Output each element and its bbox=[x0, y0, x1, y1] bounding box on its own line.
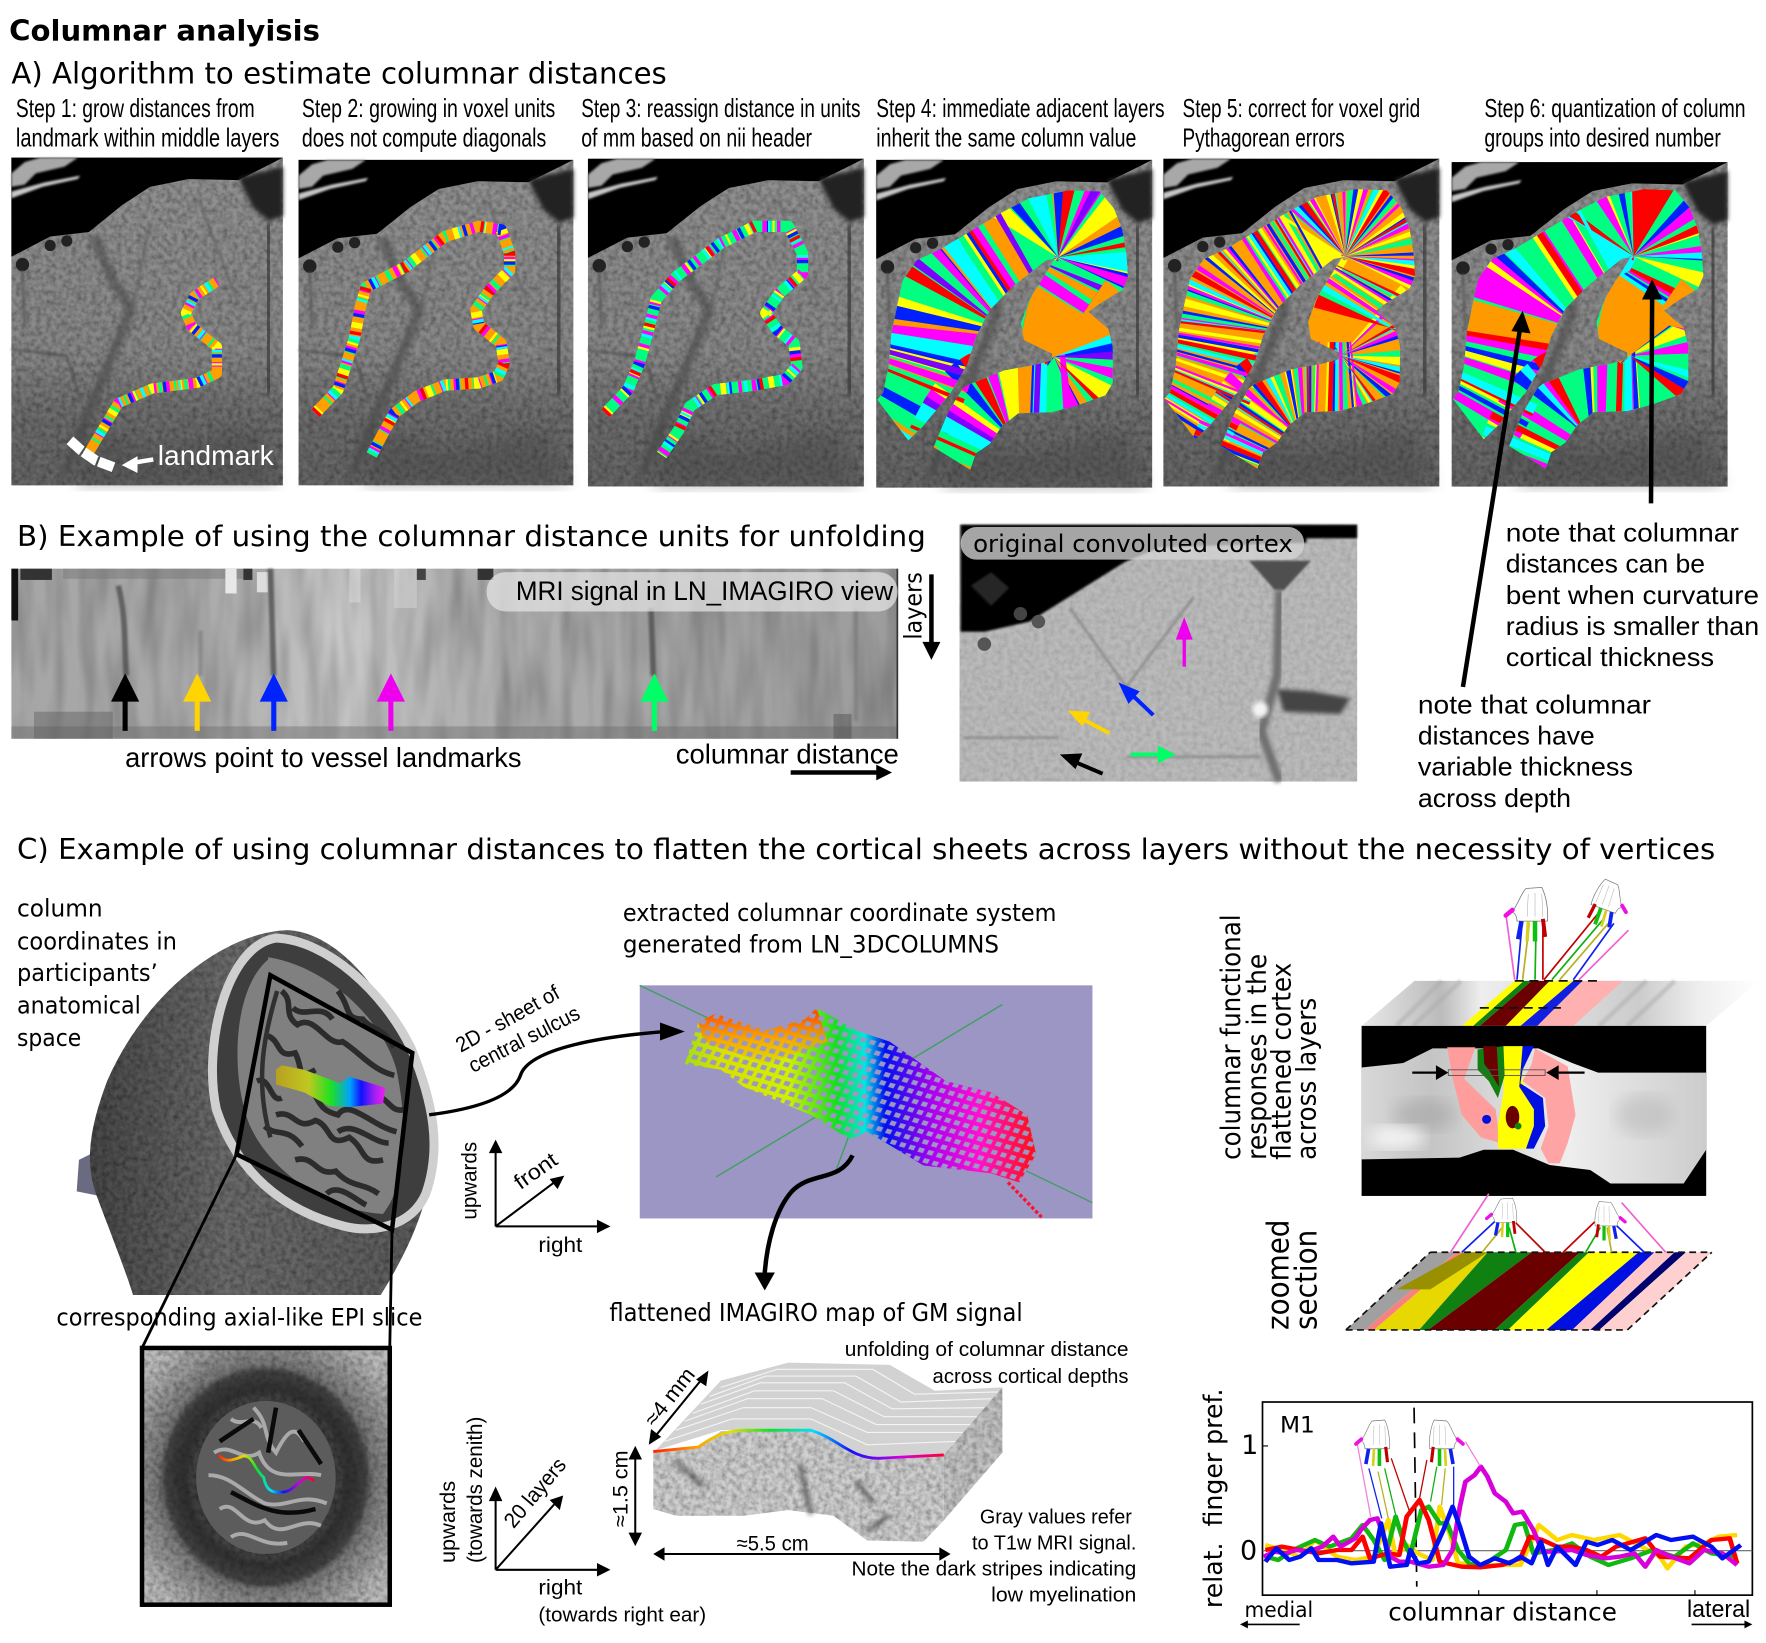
note: unfolding across depths: unfolding of columnar distance bbox=[845, 1339, 1128, 1361]
pill label: MRI signal: MRI signal in LN_IMAGIRO view bbox=[516, 576, 894, 606]
heading: section A: A) Algorithm to estimate columnar distances bbox=[11, 56, 667, 90]
step 5 label: Pythagorean errors bbox=[1183, 124, 1345, 152]
note: gray values: low myelination bbox=[991, 1584, 1136, 1606]
rainbow contour bbox=[219, 1455, 314, 1492]
zoomed hands with finger lines bbox=[1451, 1194, 1666, 1252]
note: bent columnar distances: distances can be bbox=[1506, 551, 1705, 579]
label: arrows point to vessel landmarks: arrows point to vessel landmarks bbox=[125, 742, 522, 773]
label: 2D sheet of central sulcus: 2D - sheet of bbox=[451, 981, 564, 1057]
axis label: medial: medial bbox=[1244, 1598, 1313, 1623]
green and dark red activation bbox=[1478, 1046, 1505, 1098]
note: bent columnar distances: bent when curvature bbox=[1506, 582, 1759, 610]
block top face bbox=[656, 1363, 1002, 1458]
rainbow columnar sheet bbox=[276, 1065, 385, 1107]
heading: section C: C) Example of using columnar distances to flatten the cortical sheets across layers without the necessity of vertices bbox=[17, 833, 1715, 866]
panel: step 1 MRI with partial ribbon and landmark bbox=[11, 158, 283, 485]
step 2 label: Step 2: growing in voxel units bbox=[302, 95, 555, 123]
landmark marker bbox=[70, 440, 275, 473]
cortex arrows bbox=[1060, 617, 1193, 774]
label: column coordinates: column bbox=[17, 895, 103, 923]
panel: zoomed section bands bbox=[1346, 1194, 1712, 1330]
top slab bbox=[1362, 981, 1759, 1026]
axes: zenith, layers, right ear: (towards right ear) bbox=[538, 1605, 706, 1627]
axes: zenith, layers, right ear: upwards bbox=[436, 1481, 460, 1563]
step 5 label: Step 5: correct for voxel grid bbox=[1183, 95, 1420, 123]
pink right activation bbox=[1523, 1048, 1576, 1163]
note: gray values: Gray values refer bbox=[980, 1507, 1132, 1529]
arrow: bent columns bbox=[1642, 279, 1662, 503]
black selection quadrilateral bbox=[237, 975, 412, 1230]
mesh colored grid bbox=[685, 1008, 1042, 1217]
step 6 label bbox=[1484, 95, 1746, 152]
axes: zenith, layers, right ear: 20 layers bbox=[499, 1453, 571, 1532]
label: column coordinates bbox=[17, 895, 177, 1052]
landmark marker: landmark bbox=[158, 440, 275, 471]
section box and arrows bbox=[1448, 1070, 1545, 1075]
panel: 3D columnar mesh bbox=[640, 985, 1092, 1218]
heading: section B: B) Example of using the columnar distance units for unfolding bbox=[17, 520, 926, 553]
step 2 label: does not compute diagonals bbox=[302, 124, 546, 152]
panel: axial EPI slice bbox=[142, 1154, 392, 1605]
note: bent columnar distances: cortical thickness bbox=[1506, 644, 1714, 672]
exposed brain bbox=[237, 957, 406, 1214]
head surface bbox=[90, 930, 433, 1295]
note: bent columnar distances: note that columnar bbox=[1506, 520, 1739, 548]
chart: relative finger preference across columnar distance bbox=[1199, 1388, 1752, 1608]
label: columnar functional responses: columnar functional bbox=[1216, 914, 1247, 1160]
panel: step 4 columns across layers bbox=[876, 160, 1152, 488]
label: column coordinates: anatomical bbox=[17, 992, 141, 1020]
zero dashed line bbox=[1414, 1408, 1417, 1587]
axes: upwards, front, right bbox=[457, 1140, 610, 1257]
label: corresponding axial-like EPI slice: corresponding axial-like EPI slice bbox=[56, 1303, 422, 1331]
label: zoomed section: zoomed bbox=[1261, 1220, 1296, 1330]
title: Columnar analyisis bbox=[9, 15, 320, 48]
panel: step 3 MRI with reassigned ribbon bbox=[588, 159, 864, 486]
pink left activation bbox=[1447, 1047, 1500, 1143]
label: columnar functional responses: across layers bbox=[1291, 998, 1322, 1160]
note: gray values: Note the dark stripes indicating bbox=[851, 1558, 1136, 1580]
step 5 label bbox=[1183, 95, 1420, 152]
label: columnar functional responses: flattened cortex bbox=[1267, 963, 1298, 1160]
arrow: variable thickness bbox=[1463, 311, 1531, 687]
vessel arrows bbox=[111, 673, 668, 731]
step 2 label bbox=[302, 95, 555, 152]
label: flattened IMAGIRO map: flattened IMAGIRO map of GM signal bbox=[609, 1298, 1023, 1327]
chart: relative finger preference across columnar distance: relat. finger pref. bbox=[1199, 1388, 1229, 1608]
hand icons with finger lines bbox=[1506, 877, 1634, 980]
note: unfolding across depths bbox=[845, 1339, 1128, 1388]
scalp rim and cavity bbox=[212, 938, 434, 1229]
step labels bbox=[16, 95, 1746, 152]
note: bent columnar distances bbox=[1506, 520, 1759, 672]
axes: zenith, layers, right ear bbox=[436, 1417, 706, 1627]
note: variable thickness: variable thickness bbox=[1418, 753, 1633, 781]
note: variable thickness: distances have bbox=[1418, 722, 1595, 750]
axis label: lateral: lateral bbox=[1687, 1597, 1750, 1623]
note: gray values: to T1w MRI signal. bbox=[972, 1533, 1136, 1555]
chart labels: M1 bbox=[1280, 1412, 1315, 1438]
label: extracted coordinate system bbox=[623, 899, 1056, 959]
note: unfolding across depths: across cortical depths bbox=[933, 1366, 1128, 1388]
panel: original convoluted cortex bbox=[960, 525, 1357, 782]
pill label: MRI signal bbox=[487, 572, 898, 611]
chart frame bbox=[1263, 1402, 1752, 1595]
step 4 label: Step 4: immediate adjacent layers bbox=[876, 95, 1165, 123]
finger curves bbox=[1264, 1442, 1741, 1568]
step 3 label: of mm based on nii header bbox=[581, 124, 812, 152]
yellow activation bbox=[1498, 1046, 1534, 1149]
note: bent columnar distances: radius is smaller than bbox=[1506, 613, 1759, 641]
panel: step 2 MRI with full ribbon bbox=[299, 160, 573, 485]
step 1 label: Step 1: grow distances from bbox=[16, 95, 255, 123]
panel: step 5 corrected columns bbox=[1163, 159, 1439, 486]
panel: flattened functional map bbox=[1362, 877, 1759, 1196]
axes: upwards, front, right: right bbox=[538, 1233, 582, 1257]
panel: MRI signal in IMAGIRO view bbox=[11, 569, 898, 739]
step 3 label: Step 3: reassign distance in units bbox=[581, 95, 861, 123]
EPI texture ring bbox=[176, 1381, 356, 1574]
label: columnar functional responses bbox=[1216, 914, 1322, 1160]
note: variable thickness bbox=[1418, 691, 1651, 813]
label: extracted coordinate system: generated from LN_3DCOLUMNS bbox=[623, 931, 999, 959]
step 1 label bbox=[16, 95, 279, 152]
label: extracted coordinate system: extracted columnar coordinate system bbox=[623, 899, 1056, 927]
axes: upwards, front, right: front bbox=[509, 1148, 562, 1194]
label: columnar distance with arrow: columnar distance bbox=[676, 739, 899, 770]
panel: step 6 quantized columns bbox=[1452, 159, 1728, 687]
label: column coordinates: coordinates in bbox=[17, 927, 177, 955]
block right side bbox=[944, 1387, 1002, 1520]
arrow: mesh to flattened map bbox=[755, 1155, 853, 1291]
step 1 label: landmark within middle layers bbox=[16, 124, 279, 152]
ribbon of growing distances bbox=[87, 282, 217, 455]
pixel rows at top and bottom bbox=[11, 569, 898, 739]
label: columnar functional responses: responses in the bbox=[1242, 954, 1273, 1160]
chart: relative finger preference across columnar distance: 0 bbox=[1240, 1536, 1257, 1567]
note: variable thickness: across depth bbox=[1418, 785, 1571, 813]
axes: zenith, layers, right ear: right bbox=[538, 1576, 582, 1600]
panel: flattened block: ≈5.5 cm bbox=[737, 1532, 809, 1556]
note: gray values bbox=[851, 1507, 1136, 1606]
zoom lines bbox=[142, 1154, 392, 1348]
label: zoomed section bbox=[1261, 1220, 1325, 1330]
chart: relative finger preference across columnar distance: 1 bbox=[1241, 1430, 1258, 1461]
axis label: columnar distance: columnar distance bbox=[1388, 1597, 1617, 1626]
panel: flattened block: ≈1.5 cm bbox=[608, 1450, 632, 1527]
dimension arrows bbox=[635, 1374, 948, 1554]
pill label: original convoluted cortex: original convoluted cortex bbox=[973, 530, 1293, 558]
block front face bbox=[653, 1430, 944, 1542]
panel: flattened block bbox=[608, 1363, 1002, 1561]
EPI brain folds bbox=[196, 1401, 336, 1554]
note: variable thickness: note that columnar bbox=[1418, 691, 1651, 719]
label: column coordinates: participants’ bbox=[17, 959, 158, 987]
colored surface line bbox=[653, 1430, 944, 1458]
label: zoomed section: section bbox=[1290, 1230, 1325, 1330]
ear bbox=[77, 1154, 99, 1196]
blue activation bbox=[1519, 1046, 1545, 1149]
chart hand icons bbox=[1356, 1420, 1463, 1466]
label: layers with arrow bbox=[899, 572, 940, 660]
step 4 label: inherit the same column value bbox=[876, 124, 1136, 152]
panel: head anatomy with brain window bbox=[77, 930, 434, 1295]
arrow: head to columnar system bbox=[429, 1023, 685, 1115]
axes: zenith, layers, right ear: (towards zenith) bbox=[463, 1417, 487, 1563]
step 4 label bbox=[876, 95, 1165, 152]
step 3 label bbox=[581, 95, 861, 152]
label: 2D sheet of central sulcus: central sulcus bbox=[464, 1001, 584, 1078]
axes: upwards, front, right: upwards bbox=[457, 1142, 481, 1220]
dark vessel lines bbox=[118, 569, 653, 676]
label: layers with arrow: layers bbox=[899, 572, 927, 640]
label: column coordinates: space bbox=[17, 1024, 81, 1052]
panel: flattened block: ≈4 mm bbox=[639, 1363, 700, 1431]
